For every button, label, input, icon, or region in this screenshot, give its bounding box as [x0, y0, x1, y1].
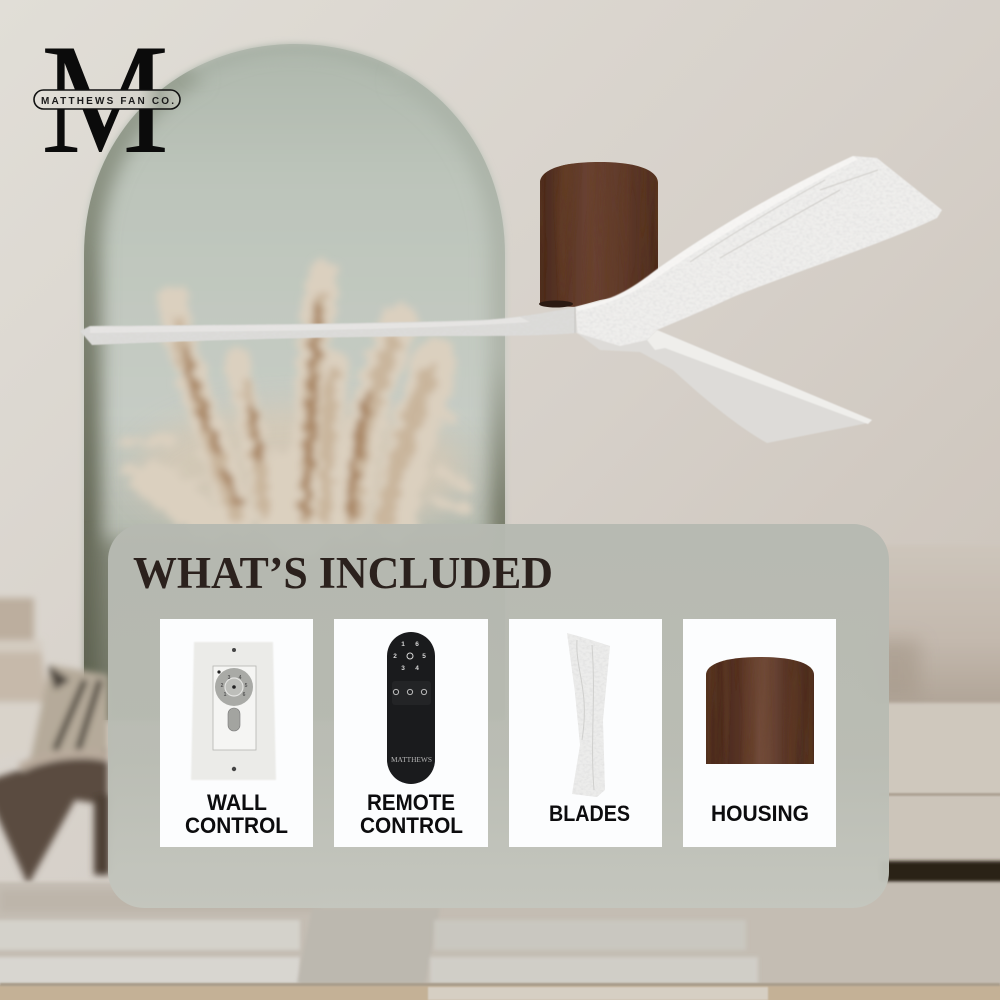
label: CONTROL — [185, 813, 288, 838]
card: wall control — [160, 619, 313, 847]
remote — [387, 632, 435, 784]
wall plate: 2 — [221, 683, 224, 689]
wall plate — [191, 642, 276, 780]
sofa: right — [870, 545, 1000, 883]
remote: 3 — [401, 665, 405, 672]
wall plate: 3 — [228, 675, 231, 681]
remote: MATTHEWS — [391, 756, 432, 764]
label: REMOTE — [367, 790, 455, 815]
logo name pill: MATTHEWS FAN CO. — [41, 96, 174, 107]
wall plate: 1 — [224, 692, 227, 698]
wall plate: 6 — [243, 692, 246, 698]
remote: 6 — [415, 641, 419, 648]
remote: 2 — [393, 653, 397, 660]
wall plate: 4 — [239, 675, 242, 681]
card: blades — [509, 619, 662, 847]
fan upper right blade — [575, 156, 942, 346]
label — [185, 790, 288, 838]
label: CONTROL — [360, 813, 463, 838]
card: housing — [683, 619, 836, 847]
pampas grass plumes — [125, 275, 470, 535]
remote: 5 — [422, 653, 426, 660]
sofa: left with cushions and throw — [0, 598, 110, 885]
remote: 1 — [401, 641, 405, 648]
logo letter M: M — [41, 12, 169, 187]
fan housing — [539, 162, 658, 308]
heading: WHAT’S INCLUDED — [133, 548, 553, 598]
wall plate: 5 — [245, 683, 248, 689]
remote: 4 — [415, 665, 419, 672]
label: HOUSING — [711, 801, 809, 826]
fan lower blade — [577, 330, 872, 443]
floor with window light — [0, 882, 1000, 1000]
logo name pill — [34, 90, 180, 109]
label — [360, 790, 463, 838]
label: WALL — [207, 790, 267, 815]
fan left blade — [80, 307, 577, 345]
ceiling fan — [80, 156, 942, 443]
label: BLADES — [549, 801, 630, 826]
arched alcove — [84, 40, 505, 740]
blade — [567, 633, 610, 797]
panel: what's included — [108, 524, 889, 908]
brand logo — [34, 12, 180, 187]
card: remote control — [334, 619, 488, 847]
plume haze — [135, 405, 465, 535]
housing — [706, 657, 814, 764]
